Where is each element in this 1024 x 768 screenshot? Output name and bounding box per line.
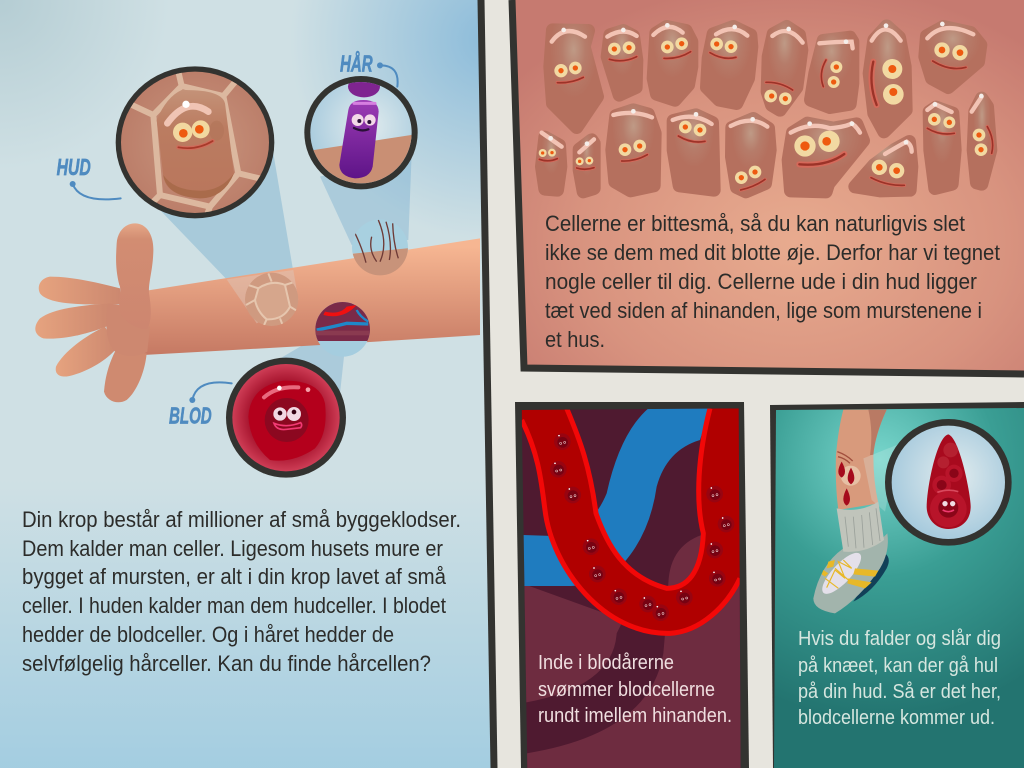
forearm (143, 238, 480, 355)
text block: intro: Din krop består af millioner af små byggeklodser. (22, 507, 461, 532)
text block: scraped knee: på knæet, kan der gå hul (798, 655, 998, 677)
label: HUD (57, 154, 121, 199)
cell mouths (539, 52, 993, 190)
text block: intro (22, 507, 461, 676)
cell brow highlights (548, 22, 984, 146)
text block: intro: selvfølgelig hårceller. Kan du finde hårcellen? (22, 651, 431, 676)
shoe shadow (853, 553, 889, 602)
text block: skin cells: et hus. (545, 327, 605, 352)
cell brows (542, 27, 982, 154)
cells (542, 26, 991, 192)
cell eyes (539, 37, 987, 184)
text block: scraped knee: på din hud. Så er det her, (798, 681, 1001, 703)
blood cells (550, 433, 734, 621)
leg illustration (813, 410, 1012, 613)
zoom circle: skin cell (116, 66, 277, 220)
zoom circle: blood drop (885, 419, 1012, 546)
lens: blood (315, 302, 372, 358)
panel: blood vessels (515, 402, 749, 768)
lens: hair (352, 220, 408, 276)
text block: intro: hedder de blodceller. Og i håret hedder de (22, 622, 394, 647)
zoom circle: hair cell (304, 76, 418, 189)
lens: skin (245, 273, 298, 327)
text block: blood vessels (538, 652, 732, 727)
panel: scraped knee (770, 402, 1024, 768)
text block: scraped knee (798, 628, 1001, 729)
text block: scraped knee: blodcellerne kommer ud. (798, 707, 995, 729)
hand (35, 223, 153, 402)
text block: blood vessels: Inde i blodårerne (538, 652, 674, 674)
sock (837, 502, 884, 552)
text block: intro: celler. I huden kalder man dem hudceller. I blodet (22, 593, 446, 618)
leg (836, 410, 887, 510)
label: HÅR: HÅR (340, 51, 373, 77)
text block: intro: bygget af mursten, er alt i din krop lavet af små (22, 564, 447, 589)
cell pupils (541, 41, 984, 180)
arm illustration (57, 51, 480, 478)
magnifier beams (160, 153, 412, 393)
label: HÅR (340, 51, 398, 87)
vessel illustration (520, 407, 743, 768)
text block: blood vessels: rundt imellem hinanden. (538, 705, 732, 727)
lighter tissue (522, 533, 743, 768)
text block: skin cells (545, 211, 1000, 352)
text block: skin cells: nogle celler til dig. Cellerne ude i din hud ligger (545, 269, 977, 294)
text block: skin cells: tæt ved siden af hinanden, lige som murstenene i (545, 298, 982, 323)
text block: skin cells: Cellerne er bittesmå, så du kan naturligvis slet (545, 211, 965, 236)
artery (522, 408, 740, 633)
text block: skin cells: ikke se dem med dit blotte øje. Derfor har vi tegnet (545, 240, 1000, 265)
skin cell characters (539, 22, 993, 192)
lens beam (863, 444, 898, 512)
panel: skin cells (512, 0, 1024, 374)
text block: blood vessels: svømmer blodcellerne (538, 679, 715, 701)
panel: arm and cell types (0, 0, 494, 768)
label: BLOD: BLOD (169, 402, 212, 428)
text block: scraped knee: Hvis du falder og slår dig (798, 628, 1001, 650)
label: HUD: HUD (57, 154, 91, 180)
vein (522, 408, 710, 586)
wound (837, 452, 861, 506)
text block: intro: Dem kalder man celler. Ligesom husets mure er (22, 536, 443, 561)
shoe (813, 533, 888, 613)
zoom circle: blood cell (226, 358, 346, 478)
label: BLOD (169, 382, 232, 428)
beam over arm (227, 270, 298, 323)
